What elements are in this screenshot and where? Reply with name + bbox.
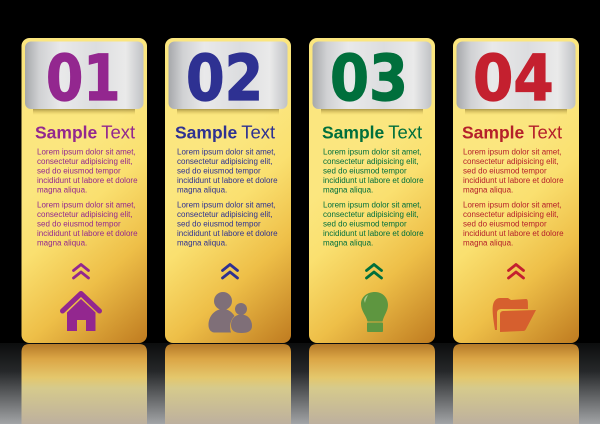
reflective floor [0,343,600,424]
body text 04: incididunt ut labore et dolore [463,176,564,185]
body text 02: sed do eiusmod tempor [177,220,261,228]
body text 01: sed do eiusmod tempor [37,220,121,228]
body text 04: Lorem ipsum dolor sit amet, [463,200,562,210]
body text 01: magna aliqua. [37,186,87,194]
icon: house [62,294,100,331]
body text 03: consectetur adipisicing elit, [323,210,419,219]
body text 03: sed do eiusmod tempor [323,166,407,176]
heading 03: SampleText [322,122,422,142]
body text 01: consectetur adipisicing elit, [37,157,133,166]
body text 04: incididunt ut labore et dolore [463,229,564,238]
body text 01: incididunt ut labore et dolore [37,176,138,185]
body text 01: Lorem ipsum dolor sit amet, [37,200,136,210]
heading 04: SampleText [462,122,562,142]
body text 03: magna aliqua. [323,186,373,194]
silver number plate 01 [25,42,144,115]
body text 02: Lorem ipsum dolor sit amet, [177,200,276,210]
body text 02: magna aliqua. [177,238,227,248]
number 02: 02 [186,42,263,115]
heading 02: SampleText [175,122,275,142]
reflection of card 01 [22,344,147,424]
body text 03: magna aliqua. [323,238,373,248]
body text 04: Lorem ipsum dolor sit amet, [463,148,562,156]
reflection of card 03 [309,344,435,424]
number 03: 03 [330,43,408,116]
body text 04: sed do eiusmod tempor [463,220,547,228]
body text 04: sed do eiusmod tempor [463,166,547,176]
body text 02: consectetur adipisicing elit, [177,210,273,219]
body text 02: consectetur adipisicing elit, [177,157,273,166]
body text 01: sed do eiusmod tempor [37,166,121,176]
body text 02: sed do eiusmod tempor [177,166,261,176]
body text 04: consectetur adipisicing elit, [463,210,559,219]
reflection of card 02 [165,344,291,424]
body text 02: incididunt ut labore et dolore [177,229,278,238]
body text 01: incididunt ut labore et dolore [37,229,138,238]
body text 01: consectetur adipisicing elit, [37,210,133,219]
arrow 03 [366,264,382,278]
icon: light bulb [361,292,388,332]
body text 02: Lorem ipsum dolor sit amet, [177,148,276,156]
body text 03: Lorem ipsum dolor sit amet, [323,148,422,156]
arrow 02 [222,264,238,278]
panel: card 04 [453,38,579,343]
body text 01: Lorem ipsum dolor sit amet, [37,148,136,156]
silver number plate 02 [168,42,288,115]
icon: people [208,292,252,333]
body text 03: Lorem ipsum dolor sit amet, [323,200,422,210]
body text 04: consectetur adipisicing elit, [463,157,559,166]
silver number plate 04 [456,42,576,115]
reflection of card 04 [453,344,579,424]
body text 04: magna aliqua. [463,238,513,248]
panel: card 03 [309,38,435,343]
body text 03: incididunt ut labore et dolore [323,176,424,185]
panel: card 01 [22,38,147,343]
heading 01: SampleText [35,122,135,142]
body text 02: magna aliqua. [177,186,227,194]
body text 03: sed do eiusmod tempor [323,220,407,228]
icon: folder [493,298,536,332]
body text 04: magna aliqua. [463,186,513,194]
arrow 04 [508,264,524,278]
silver number plate 03 [312,42,432,115]
panel: card 02 [165,38,291,343]
body text 03: consectetur adipisicing elit, [323,157,419,166]
body text 03: incididunt ut labore et dolore [323,229,424,238]
number 04: 04 [473,43,554,116]
arrow 01 [74,264,88,278]
body text 02: incididunt ut labore et dolore [177,176,278,185]
body text 01: magna aliqua. [37,238,87,248]
number 01: 01 [46,42,121,115]
